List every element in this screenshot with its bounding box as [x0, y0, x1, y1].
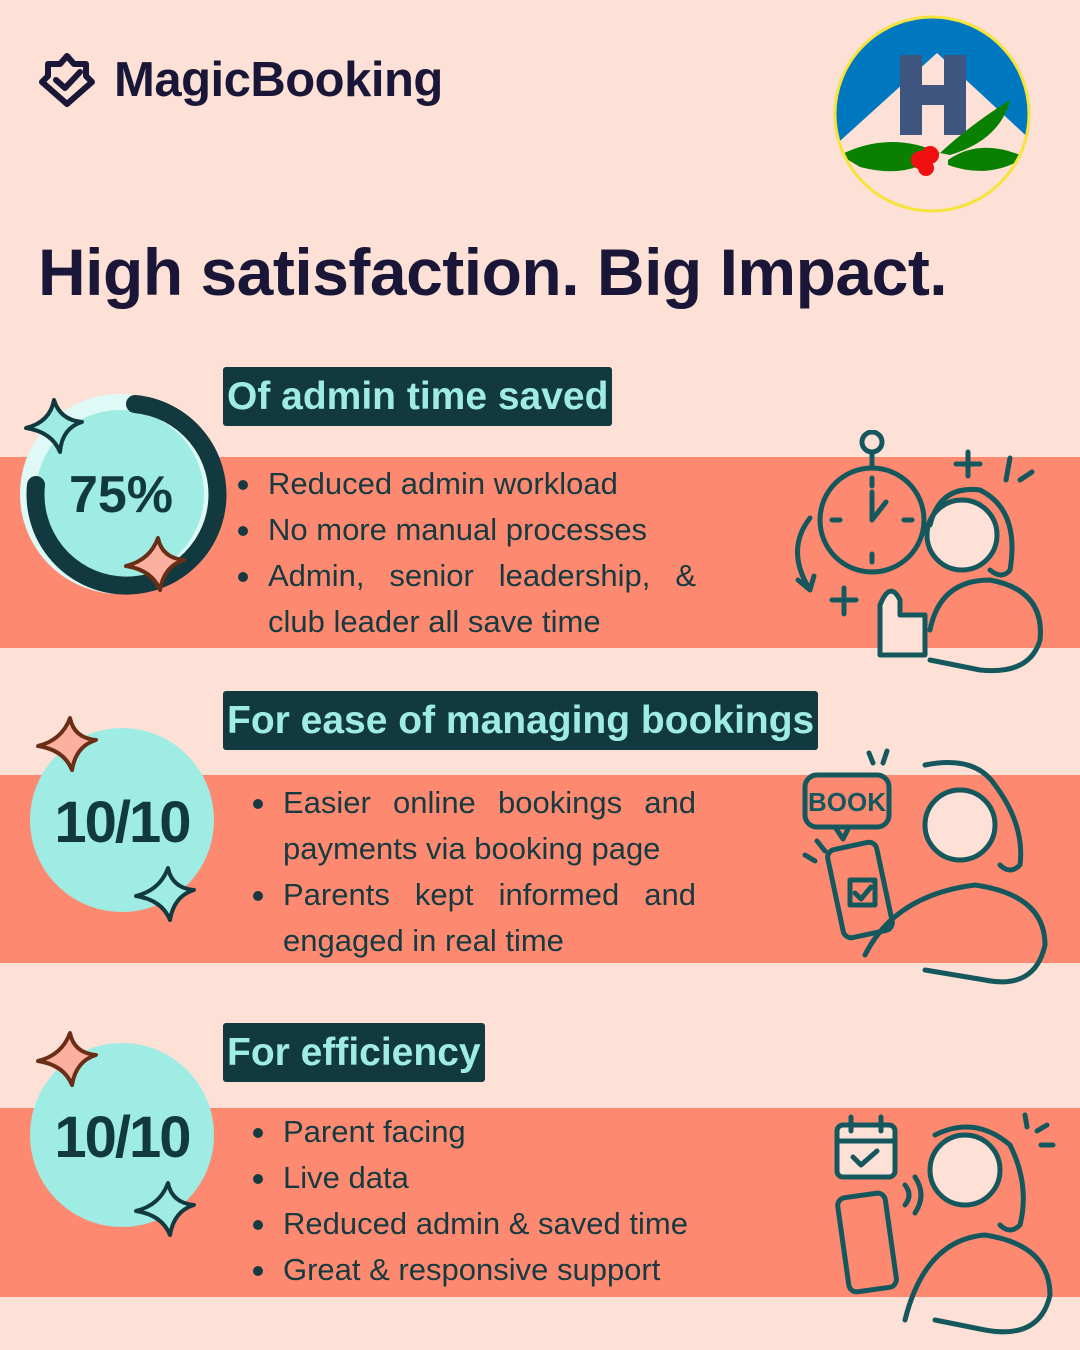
bullets 1: No more manual processes — [268, 512, 647, 547]
band 1 — [0, 457, 1080, 648]
heading 3: For efficiency — [227, 1031, 481, 1074]
stat 1: 75% ring: 75% — [69, 466, 173, 524]
band 3 — [0, 1108, 1080, 1297]
badge logo — [834, 16, 1030, 212]
stat 3 circle: 10/10 — [54, 1105, 190, 1170]
bullets 2: Parents kept informed and — [283, 877, 696, 912]
stat 2 circle — [30, 716, 214, 922]
title: High satisfaction. Big Impact. — [38, 235, 947, 309]
bullets 1: Reduced admin workload — [268, 466, 618, 501]
illustration 2: phone booking — [802, 748, 1048, 984]
bullets 1: Admin, senior leadership, & — [268, 558, 696, 593]
stat 3 circle — [30, 1031, 214, 1237]
heading 1: Of admin time saved — [227, 375, 608, 418]
heading 2: For ease of managing bookings — [227, 699, 814, 742]
bullets 1 — [238, 466, 696, 639]
stat 1: 75% ring — [20, 394, 226, 595]
stat 2 circle: 10/10 — [54, 790, 190, 855]
illustration 2: phone booking: BOOK — [808, 787, 886, 817]
bullets 1: club leader all save time — [268, 604, 601, 639]
logo: MagicBooking — [114, 53, 443, 107]
bullets 2: payments via booking page — [283, 831, 660, 866]
bullets 2: Easier online bookings and — [283, 785, 696, 820]
band 2 — [0, 775, 1080, 963]
bullets 3: Great & responsive support — [283, 1252, 660, 1287]
bullets 2 — [253, 785, 696, 958]
bullets 3: Reduced admin & saved time — [283, 1206, 688, 1241]
bullets 2: engaged in real time — [283, 923, 564, 958]
illustration 3: calendar phone person — [834, 1112, 1056, 1334]
bullets 3: Parent facing — [283, 1114, 466, 1149]
illustration 1: stopwatch person — [794, 430, 1043, 674]
bullets 3: Live data — [283, 1160, 409, 1195]
bullets 3 — [253, 1114, 688, 1287]
